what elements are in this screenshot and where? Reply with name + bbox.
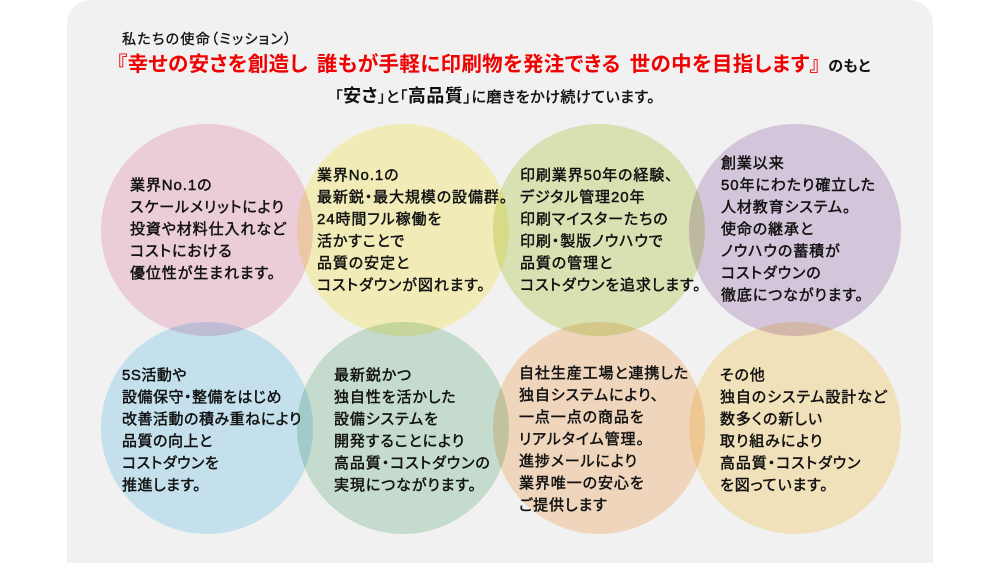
text: scale merit: 優位性が生まれます。 [130, 265, 276, 282]
text: equipment systems: 実現につながります。 [334, 477, 477, 494]
text: factory linkage: ご提供します [519, 497, 608, 514]
text: fifty years experience: 印刷業界50年の経験、 [520, 167, 674, 184]
text: 5S activity: 品質の向上と [122, 433, 213, 450]
circle: sage green [297, 322, 509, 534]
heading: quality sentence: 「安さ」と「高品質」に磨きをかけ続けています。 [335, 86, 655, 106]
text: equipment systems [334, 367, 491, 494]
circle: orange [493, 322, 705, 534]
heading: mission label: 私たちの使命（ミッション） [122, 31, 292, 47]
text: other initiatives: 数多くの新しい [720, 411, 823, 428]
text: factory linkage [519, 365, 689, 514]
text: other initiatives: を図っています。 [720, 477, 829, 494]
text: staff education: 50年にわたり確立した [721, 177, 876, 194]
text: fifty years experience [520, 167, 701, 294]
text: 5S activity [122, 367, 302, 494]
text: staff education: 使命の継承と [721, 221, 814, 238]
text: other initiatives: 取り組みにより [720, 433, 823, 450]
text: other initiatives: 高品質・コストダウン [720, 455, 861, 472]
text: equipment systems: 高品質・コストダウンの [334, 455, 491, 472]
text: scale merit: 業界No.1の [130, 177, 212, 194]
text: latest equipment [317, 167, 508, 294]
text: factory linkage: 進捗メールにより [519, 453, 638, 470]
text: fifty years experience: 印刷マイスターたちの [520, 211, 669, 228]
text: other initiatives: その他 [720, 367, 766, 384]
text: latest equipment: 24時間フル稼働を [317, 211, 442, 228]
text: scale merit: 投資や材料仕入れなど [130, 221, 287, 238]
text: latest equipment: 最新鋭・最大規模の設備群。 [317, 189, 508, 206]
circle: purple [689, 124, 901, 336]
text: scale merit: スケールメリットにより [130, 199, 285, 216]
text: equipment systems: 独自性を活かした [334, 389, 457, 406]
text: factory linkage: 独自システムにより、 [519, 387, 659, 404]
text: latest equipment: 業界No.1の [317, 167, 399, 184]
text: factory linkage: 一点一点の商品を [519, 409, 645, 426]
text: 5S activity: 推進します。 [122, 477, 201, 494]
text: scale merit: コストにおける [130, 243, 232, 260]
circle: sand [689, 322, 901, 534]
text: fifty years experience: デジタル管理20年 [520, 189, 645, 206]
text: staff education [721, 155, 876, 304]
text: 5S activity: 設備保守・整備をはじめ [122, 389, 282, 406]
text: latest equipment: 品質の安定と [317, 255, 410, 272]
text: factory linkage: リアルタイム管理。 [519, 431, 645, 448]
text: fifty years experience: コストダウンを追求します。 [520, 277, 701, 294]
text: 5S activity: コストダウンを [122, 455, 219, 472]
text: fifty years experience: 品質の管理と [520, 255, 613, 272]
heading: mission statement: 『幸せの安さを創造し 誰もが手軽に印刷物を発注できる 世の中を目指します』 のもと [117, 53, 871, 76]
circle: yellow [297, 124, 509, 336]
text: factory linkage: 自社生産工場と連携した [519, 365, 689, 382]
text: other initiatives [720, 367, 888, 494]
circle: yellow green [493, 124, 705, 336]
text: staff education: コストダウンの [721, 265, 822, 282]
text: equipment systems: 最新鋭かつ [334, 367, 412, 384]
text: staff education: 人材教育システム。 [721, 199, 851, 216]
text: staff education: 徹底につながります。 [721, 287, 864, 304]
text: scale merit [130, 177, 287, 282]
text: staff education: ノウハウの蓄積が [721, 243, 841, 260]
text: factory linkage: 業界唯一の安心を [519, 475, 645, 492]
text: staff education: 創業以来 [721, 155, 785, 172]
text: 5S activity: 改善活動の積み重ねにより [122, 411, 302, 428]
text: latest equipment: コストダウンが図れます。 [317, 277, 486, 294]
circle: pink [101, 124, 313, 336]
circle: blue [101, 322, 313, 534]
text: other initiatives: 独自のシステム設計など [720, 389, 888, 406]
text: equipment systems: 開発することにより [334, 433, 465, 450]
text: 5S activity: 5S活動や [122, 367, 187, 384]
text: latest equipment: 活かすことで [317, 233, 405, 250]
text: equipment systems: 設備システムを [334, 411, 439, 428]
text: fifty years experience: 印刷・製版ノウハウで [520, 233, 664, 250]
